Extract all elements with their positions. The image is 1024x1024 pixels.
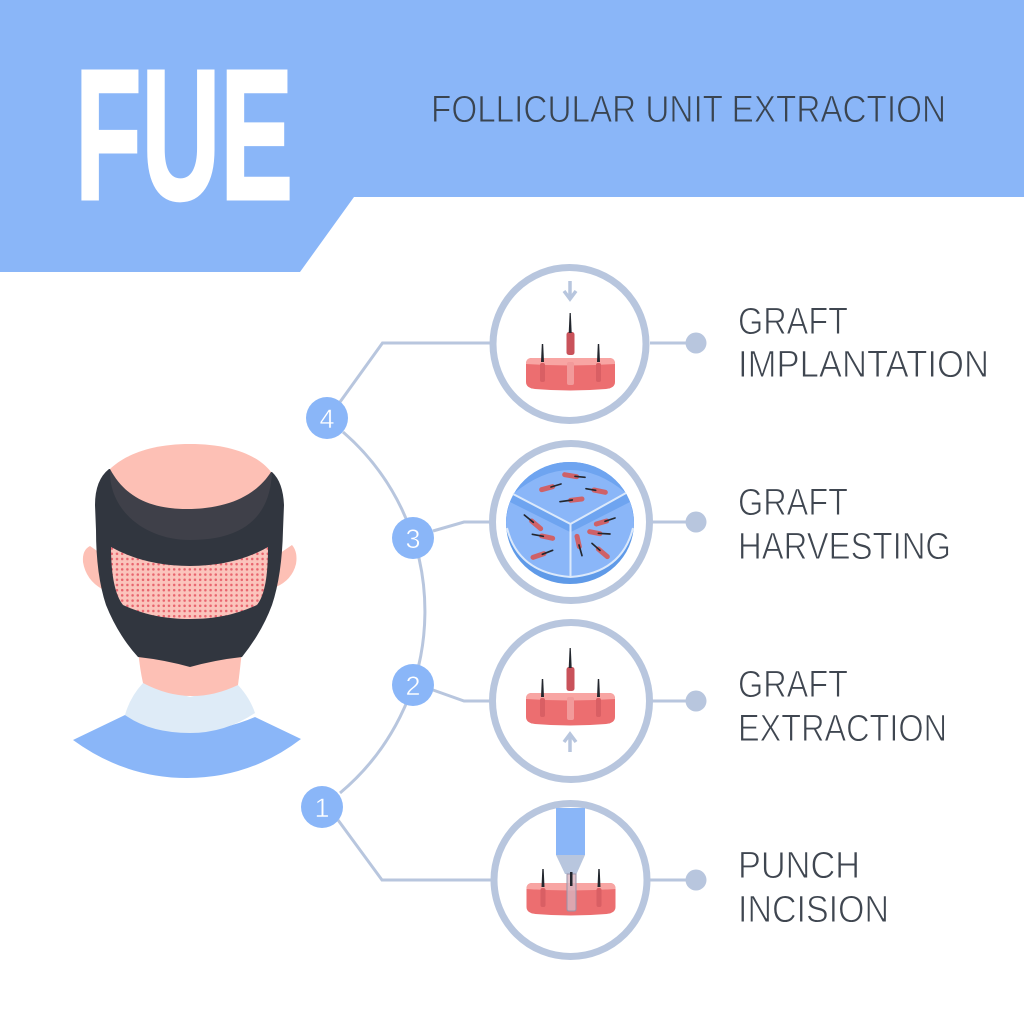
punch tool body [556,808,585,855]
header banner [0,0,1024,272]
connector: timeline arc [340,432,425,793]
pointer: extraction [650,690,706,712]
connector: step 3 [433,522,492,531]
icon: graft extraction [492,622,650,780]
neck [138,650,242,696]
dish left sector [506,502,570,577]
graft [566,332,574,355]
hair highlight [110,469,272,540]
connector: step 1 [338,820,492,880]
label: graft extraction [738,664,947,750]
pointer: harvesting [650,512,706,532]
number badge 3: 3 [405,524,421,554]
label: punch incision: PUNCH [738,845,860,887]
connector: step 4 [340,343,492,402]
icon: graft harvesting dish [492,444,650,600]
number badge 1 [301,786,343,828]
right ear [270,545,296,587]
dish right sector [571,502,634,577]
label: graft implantation: IMPLANTATION [738,344,989,386]
bald crown [110,444,271,509]
icon: graft implantation [493,268,646,420]
label: punch incision [738,845,889,931]
graft [566,667,574,691]
label: graft harvesting: HARVESTING [738,526,951,568]
illustration: back of head with donor area [73,444,301,778]
pointer: implantation [650,332,706,354]
number badge 2 [392,664,434,706]
dish base [506,462,634,584]
label: punch incision: INCISION [738,889,889,931]
centre hair [570,872,572,886]
label: graft harvesting [738,482,951,568]
arrow up [564,734,576,752]
label: graft extraction: GRAFT [738,664,848,706]
dish upper wall [506,462,634,540]
label: graft extraction: EXTRACTION [738,708,947,750]
punch needle [567,874,576,911]
number badge 2: 2 [405,671,421,701]
donor area dots [111,547,268,619]
shirt [73,715,301,778]
collar [125,683,255,733]
dish top sector [513,470,626,524]
number badge 4 [306,397,348,439]
pointer: incision [650,870,706,890]
punch tool tip [556,855,585,874]
arrow down [564,281,576,299]
number badge 4: 4 [319,404,335,434]
label: graft implantation [738,301,989,386]
subtitle: FOLLICULAR UNIT EXTRACTION [431,89,946,131]
label: graft implantation: GRAFT [738,301,848,343]
label: graft harvesting: GRAFT [738,482,848,524]
number badge 1: 1 [314,793,330,823]
hair [95,469,284,667]
left ear [83,546,110,589]
title: FUE: FUE [75,32,293,239]
dish dividers [507,493,633,577]
number badge 3 [392,517,434,559]
connector: step 2 [433,690,492,701]
icon: punch incision [494,804,647,956]
grafts [524,475,615,557]
